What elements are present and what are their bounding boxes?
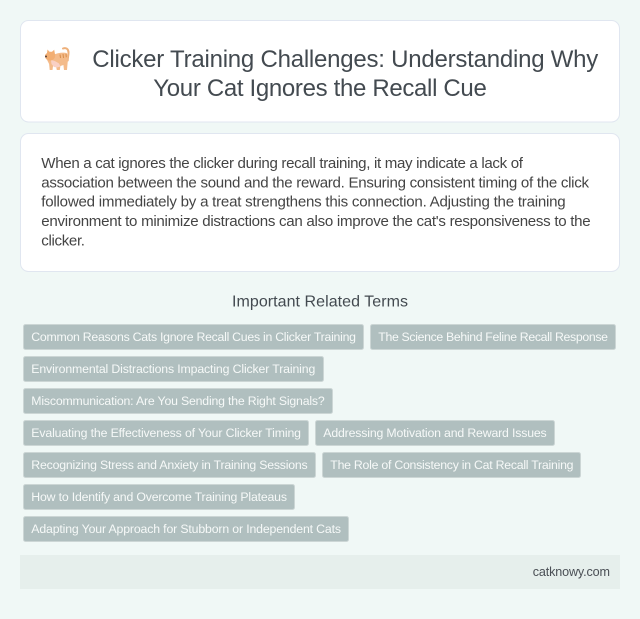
title: Your Cat Ignores the Recall Cue	[153, 75, 487, 102]
tag: Adapting Your Approach for Stubborn or Independent Cats	[31, 522, 341, 536]
text block: description paragraph: clicker.	[41, 232, 85, 249]
tag	[24, 388, 332, 414]
heading: related terms: Important Related Terms	[232, 294, 408, 310]
text block: description paragraph: followed immediately by a treat strengthens this connection. Adjusting the training	[41, 194, 566, 211]
tag: The Science Behind Feline Recall Response	[378, 330, 608, 344]
tag: Environmental Distractions Impacting Clicker Training	[31, 362, 315, 376]
tag	[24, 516, 348, 542]
footer	[20, 555, 620, 589]
tag: Addressing Motivation and Reward Issues	[323, 426, 547, 440]
text block: description paragraph: environment to minimize distractions can also improve the cat's responsiveness to the	[41, 213, 591, 230]
panel: description	[20, 134, 620, 272]
tag	[316, 420, 554, 446]
panel: related term tags	[24, 324, 616, 542]
tag: The Role of Consistency in Cat Recall Training	[330, 458, 574, 472]
title: Clicker Training Challenges: Understanding Why	[92, 46, 598, 73]
tag: Recognizing Stress and Anxiety in Training Sessions	[31, 458, 308, 472]
text block: description paragraph	[41, 155, 591, 249]
icon: cat	[45, 48, 68, 70]
tag	[322, 452, 580, 478]
tag	[370, 324, 616, 350]
tag	[24, 484, 294, 510]
tag: Common Reasons Cats Ignore Recall Cues in Clicker Training	[31, 330, 356, 344]
tag: How to Identify and Overcome Training Plateaus	[31, 490, 287, 504]
tag: Miscommunication: Are You Sending the Right Signals?	[31, 394, 325, 408]
title	[92, 46, 598, 102]
panel: title card	[20, 20, 620, 122]
tag	[24, 420, 308, 446]
tag: Evaluating the Effectiveness of Your Clicker Timing	[31, 426, 301, 440]
footer source text: catknowy.com	[533, 565, 610, 579]
text block: description paragraph: When a cat ignores the clicker during recall training, it may indicate a lack of	[41, 155, 524, 172]
text block: description paragraph: association between the sound and the reward. Ensuring consistent timing of the click	[41, 174, 589, 191]
tag	[24, 324, 364, 350]
tag	[24, 356, 324, 382]
tag	[24, 452, 316, 478]
